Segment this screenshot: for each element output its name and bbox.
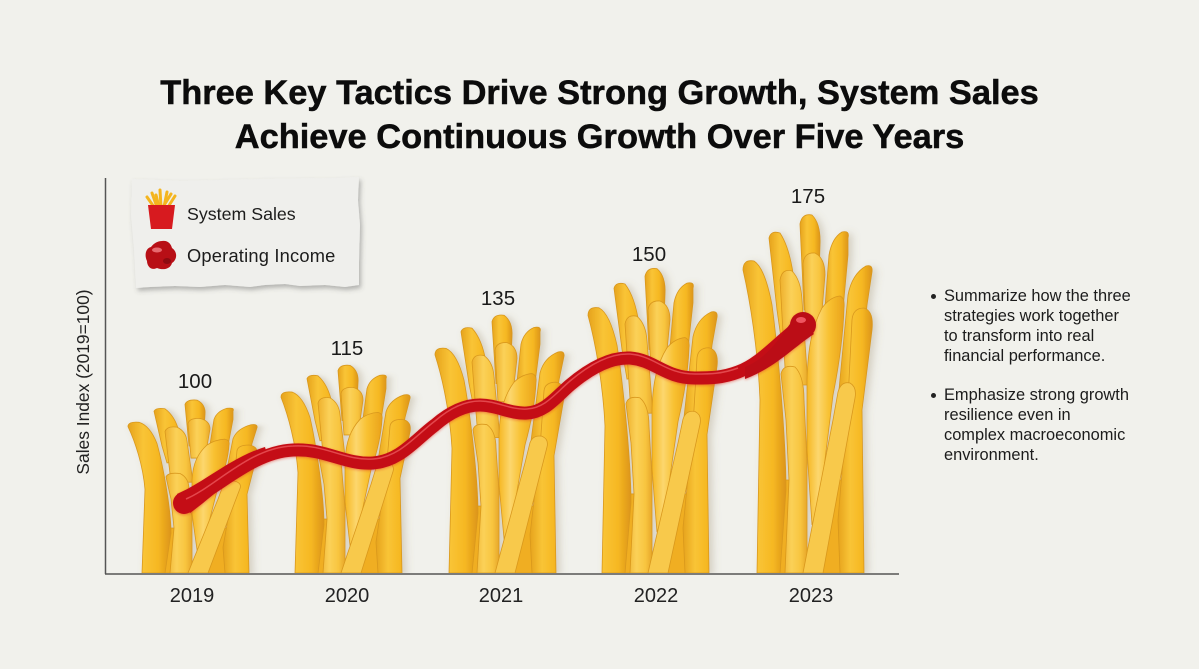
year labels: 2022: [634, 585, 678, 607]
text block: summary bullets: strategies work together: [944, 307, 1119, 325]
text block: summary bullets: complex macroeconomic: [944, 426, 1125, 444]
text block: summary bullets: financial performance.: [944, 347, 1105, 365]
value labels: [178, 185, 825, 393]
value labels: 115: [331, 337, 363, 360]
title: [160, 74, 1039, 156]
text block: summary bullets: to transform into real: [944, 327, 1094, 345]
legend paper: [131, 177, 360, 288]
y axis line: [104, 178, 106, 574]
text block: summary bullets: [931, 287, 1131, 464]
text block: summary bullets: Summarize how the three: [944, 287, 1131, 305]
legend icon: fries carton: [147, 190, 175, 229]
bar: 2020 fries, value 115: [281, 365, 410, 573]
y axis title: Sales Index (2019=100): [73, 289, 93, 475]
x axis line: [105, 573, 899, 575]
bar: 2023 fries, value 175: [743, 215, 872, 573]
year labels: 2019: [170, 585, 214, 607]
bar: 2021 fries, value 135: [435, 315, 564, 573]
bar: 2019 fries, value 100: [128, 400, 257, 573]
legend label: Operating Income: Operating Income: [187, 245, 336, 266]
title: Achieve Continuous Growth Over Five Years: [235, 118, 964, 156]
value labels: 175: [791, 185, 825, 208]
value labels: 100: [178, 370, 212, 393]
value labels: 135: [481, 287, 515, 310]
legend label: System Sales: System Sales: [187, 204, 296, 224]
year labels: [170, 585, 833, 607]
year labels: 2021: [479, 585, 523, 607]
value labels: 150: [632, 243, 666, 266]
text block: summary bullets: resilience even in: [944, 406, 1071, 424]
bar: 2022 fries, value 150: [588, 268, 717, 573]
text block: summary bullets: Emphasize strong growth: [944, 386, 1129, 404]
legend: torn paper card: [131, 177, 360, 288]
chart: fries bars with ketchup line: [76, 178, 899, 602]
year labels: 2023: [789, 585, 833, 607]
ketchup line: operating income: [173, 312, 816, 514]
legend icon: ketchup blob: [146, 241, 176, 269]
title: Three Key Tactics Drive Strong Growth, System Sales: [160, 74, 1039, 112]
year labels: 2020: [325, 585, 369, 607]
text block: summary bullets: environment.: [944, 446, 1039, 464]
